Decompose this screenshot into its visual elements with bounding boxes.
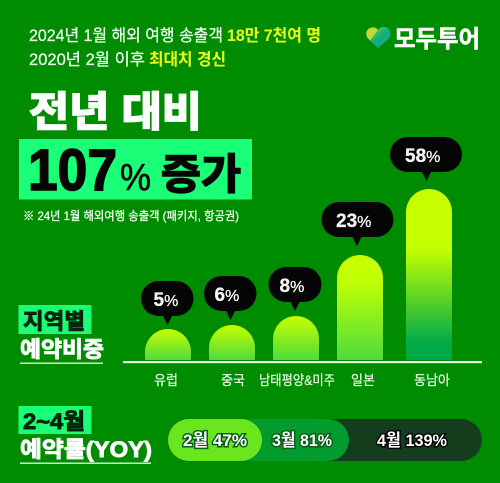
callout: 23% — [322, 202, 394, 246]
highlight: 107% 증가 — [19, 138, 252, 203]
callout: 6% — [204, 276, 256, 320]
highlight: 107% 증가: 107 — [28, 138, 117, 203]
segment: 2월 47% — [168, 419, 262, 461]
footnote: ※ 24년 1월 해외여행 송출객 (패키지, 항공권) — [23, 208, 239, 223]
callout: 23%: 23% — [336, 211, 371, 232]
bar: 중국 6% — [209, 325, 255, 360]
section label: 지역별 예약비중: 예약비중 — [20, 337, 104, 362]
stacked pill: 2~4월 예약률 — [168, 419, 482, 461]
intro text: 2024년 1월 해외 여행 송출객 — [29, 26, 223, 45]
callout: 5% — [141, 281, 194, 325]
intro text: 최대치 경신 — [149, 50, 226, 69]
callout: 6%: 6% — [214, 285, 239, 306]
segment: 4월 139% — [168, 419, 482, 461]
intro text — [29, 26, 321, 69]
intro text: 2020년 2월 이후 — [29, 50, 145, 69]
section label: 지역별 예약비중 — [18, 305, 104, 364]
callout: 8% — [268, 267, 322, 311]
label: 4월 139%: 4월 139% — [377, 431, 447, 450]
category labels: 동남아 — [414, 373, 451, 388]
heading: 전년 대비: 전년 대비 — [29, 89, 202, 135]
callout: 58%: 58% — [405, 146, 440, 167]
bar: 일본 23% — [337, 255, 383, 360]
intro text: 18만 7천여 명 — [227, 26, 321, 45]
section label: 2~4월 예약률(YOY): 예약률(YOY) — [20, 437, 152, 462]
highlight: 107% 증가: 증가 — [161, 151, 241, 198]
category labels: 남태평양&미주 — [259, 373, 335, 388]
segment: 3월 81% — [168, 419, 349, 461]
callout: 58% — [390, 137, 462, 181]
logo: 모두투어: 모두투어 — [394, 26, 480, 53]
bar: 유럽 5% — [145, 329, 191, 360]
category labels: 유럽 — [154, 373, 178, 388]
section label: 2~4월 예약률(YOY): 2~4월 — [23, 409, 85, 434]
highlight: 107% 증가: % — [120, 157, 151, 199]
label: 2월 47%: 2월 47% — [183, 431, 247, 450]
category labels — [154, 373, 451, 388]
section label: 2~4월 예약률(YOY) — [18, 406, 152, 464]
category labels: 일본 — [351, 373, 375, 388]
bar chart: regional booking share — [123, 189, 482, 388]
section label: 지역별 예약비중: 지역별 — [23, 309, 85, 334]
callout: 5%: 5% — [154, 290, 178, 311]
callout: 8%: 8% — [280, 276, 304, 297]
bar: 동남아 58% — [406, 189, 452, 360]
label: 3월 81%: 3월 81% — [272, 431, 332, 450]
category labels: 중국 — [221, 373, 245, 388]
bar: 남태평양&미주 8% — [273, 316, 319, 360]
axis — [123, 361, 482, 363]
